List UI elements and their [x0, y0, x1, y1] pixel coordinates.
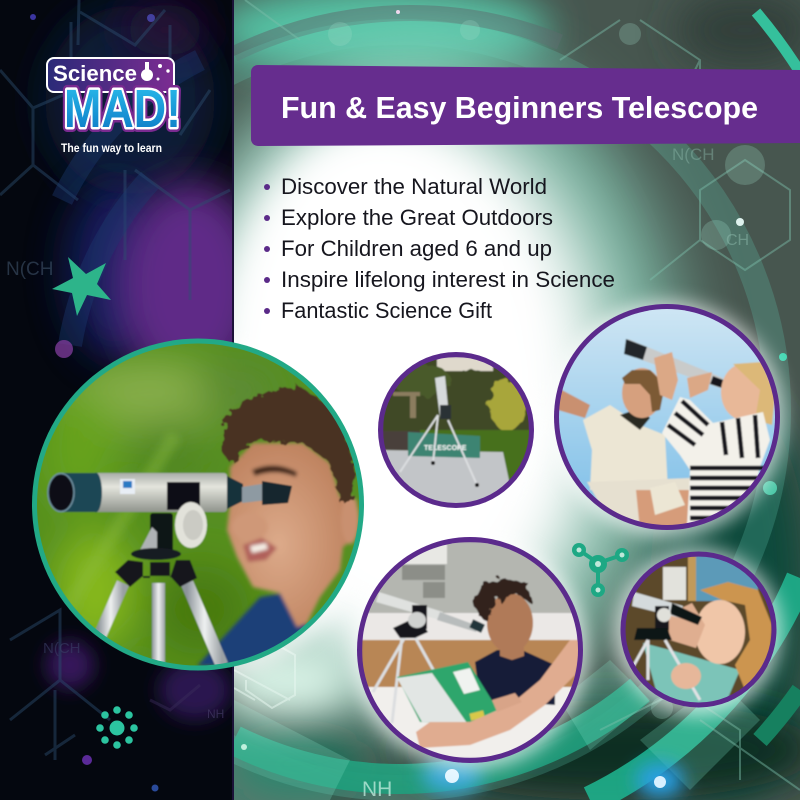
- panel: dark purple left background: N(CH: [43, 640, 80, 657]
- girl: [720, 365, 761, 419]
- photo: boy reading leaflet with telescope: [357, 537, 583, 763]
- telescope legs: [98, 583, 123, 640]
- facets: [234, 660, 760, 800]
- logo: Science Mad: [47, 58, 181, 155]
- glow behind photo circles: [234, 290, 798, 783]
- telescope tube: [90, 473, 227, 512]
- bullet list: For Children aged 6 and up: [281, 236, 552, 261]
- photo: telescope with box: TELESCOPE: [424, 445, 467, 452]
- boy: [197, 443, 359, 666]
- bullet list: Explore the Great Outdoors: [281, 205, 553, 230]
- panel: dark purple left background: [0, 0, 232, 800]
- panel: white and teal right background: N(CH: [672, 145, 714, 164]
- leaflet: [397, 662, 498, 723]
- bullet list: Discover the Natural World: [281, 174, 547, 199]
- icon: molecule: [572, 543, 629, 597]
- boy: [475, 650, 555, 705]
- icon: green star: [52, 257, 111, 316]
- icon: dotted circle: [96, 706, 138, 749]
- logo word: Science: Science: [53, 61, 137, 86]
- photo: boy and girl with telescope: [554, 304, 780, 530]
- bullet list: [264, 174, 615, 323]
- bullet list: Inspire lifelong interest in Science: [281, 267, 615, 292]
- telescope on table: [373, 637, 435, 723]
- telescope: [625, 339, 723, 388]
- logo tagline: The fun way to learn: [61, 143, 162, 155]
- panel: white and teal right background: [234, 0, 800, 800]
- ring bands: [234, 5, 800, 800]
- photo: telescope with box: [378, 352, 534, 508]
- logo word outline: MAD!: [64, 79, 181, 139]
- boy: [558, 388, 590, 418]
- panel: white and teal right background: CH: [726, 232, 749, 249]
- arm: [416, 640, 583, 748]
- logo word: MAD!: MAD!: [64, 79, 181, 139]
- bullet list: Fantastic Science Gift: [281, 298, 492, 323]
- panel: dark purple left background: NH: [207, 707, 224, 721]
- teal falloff and white glow: [155, 45, 685, 725]
- photo: girl looking through telescope: [620, 552, 776, 708]
- title: Fun & Easy Beginners Telescope: [281, 90, 758, 125]
- heading banner: [251, 65, 800, 146]
- panel: dark purple left background: N(CH: [6, 259, 54, 280]
- photo: boy looking through telescope: [32, 338, 364, 670]
- logo flask icon: [141, 62, 170, 81]
